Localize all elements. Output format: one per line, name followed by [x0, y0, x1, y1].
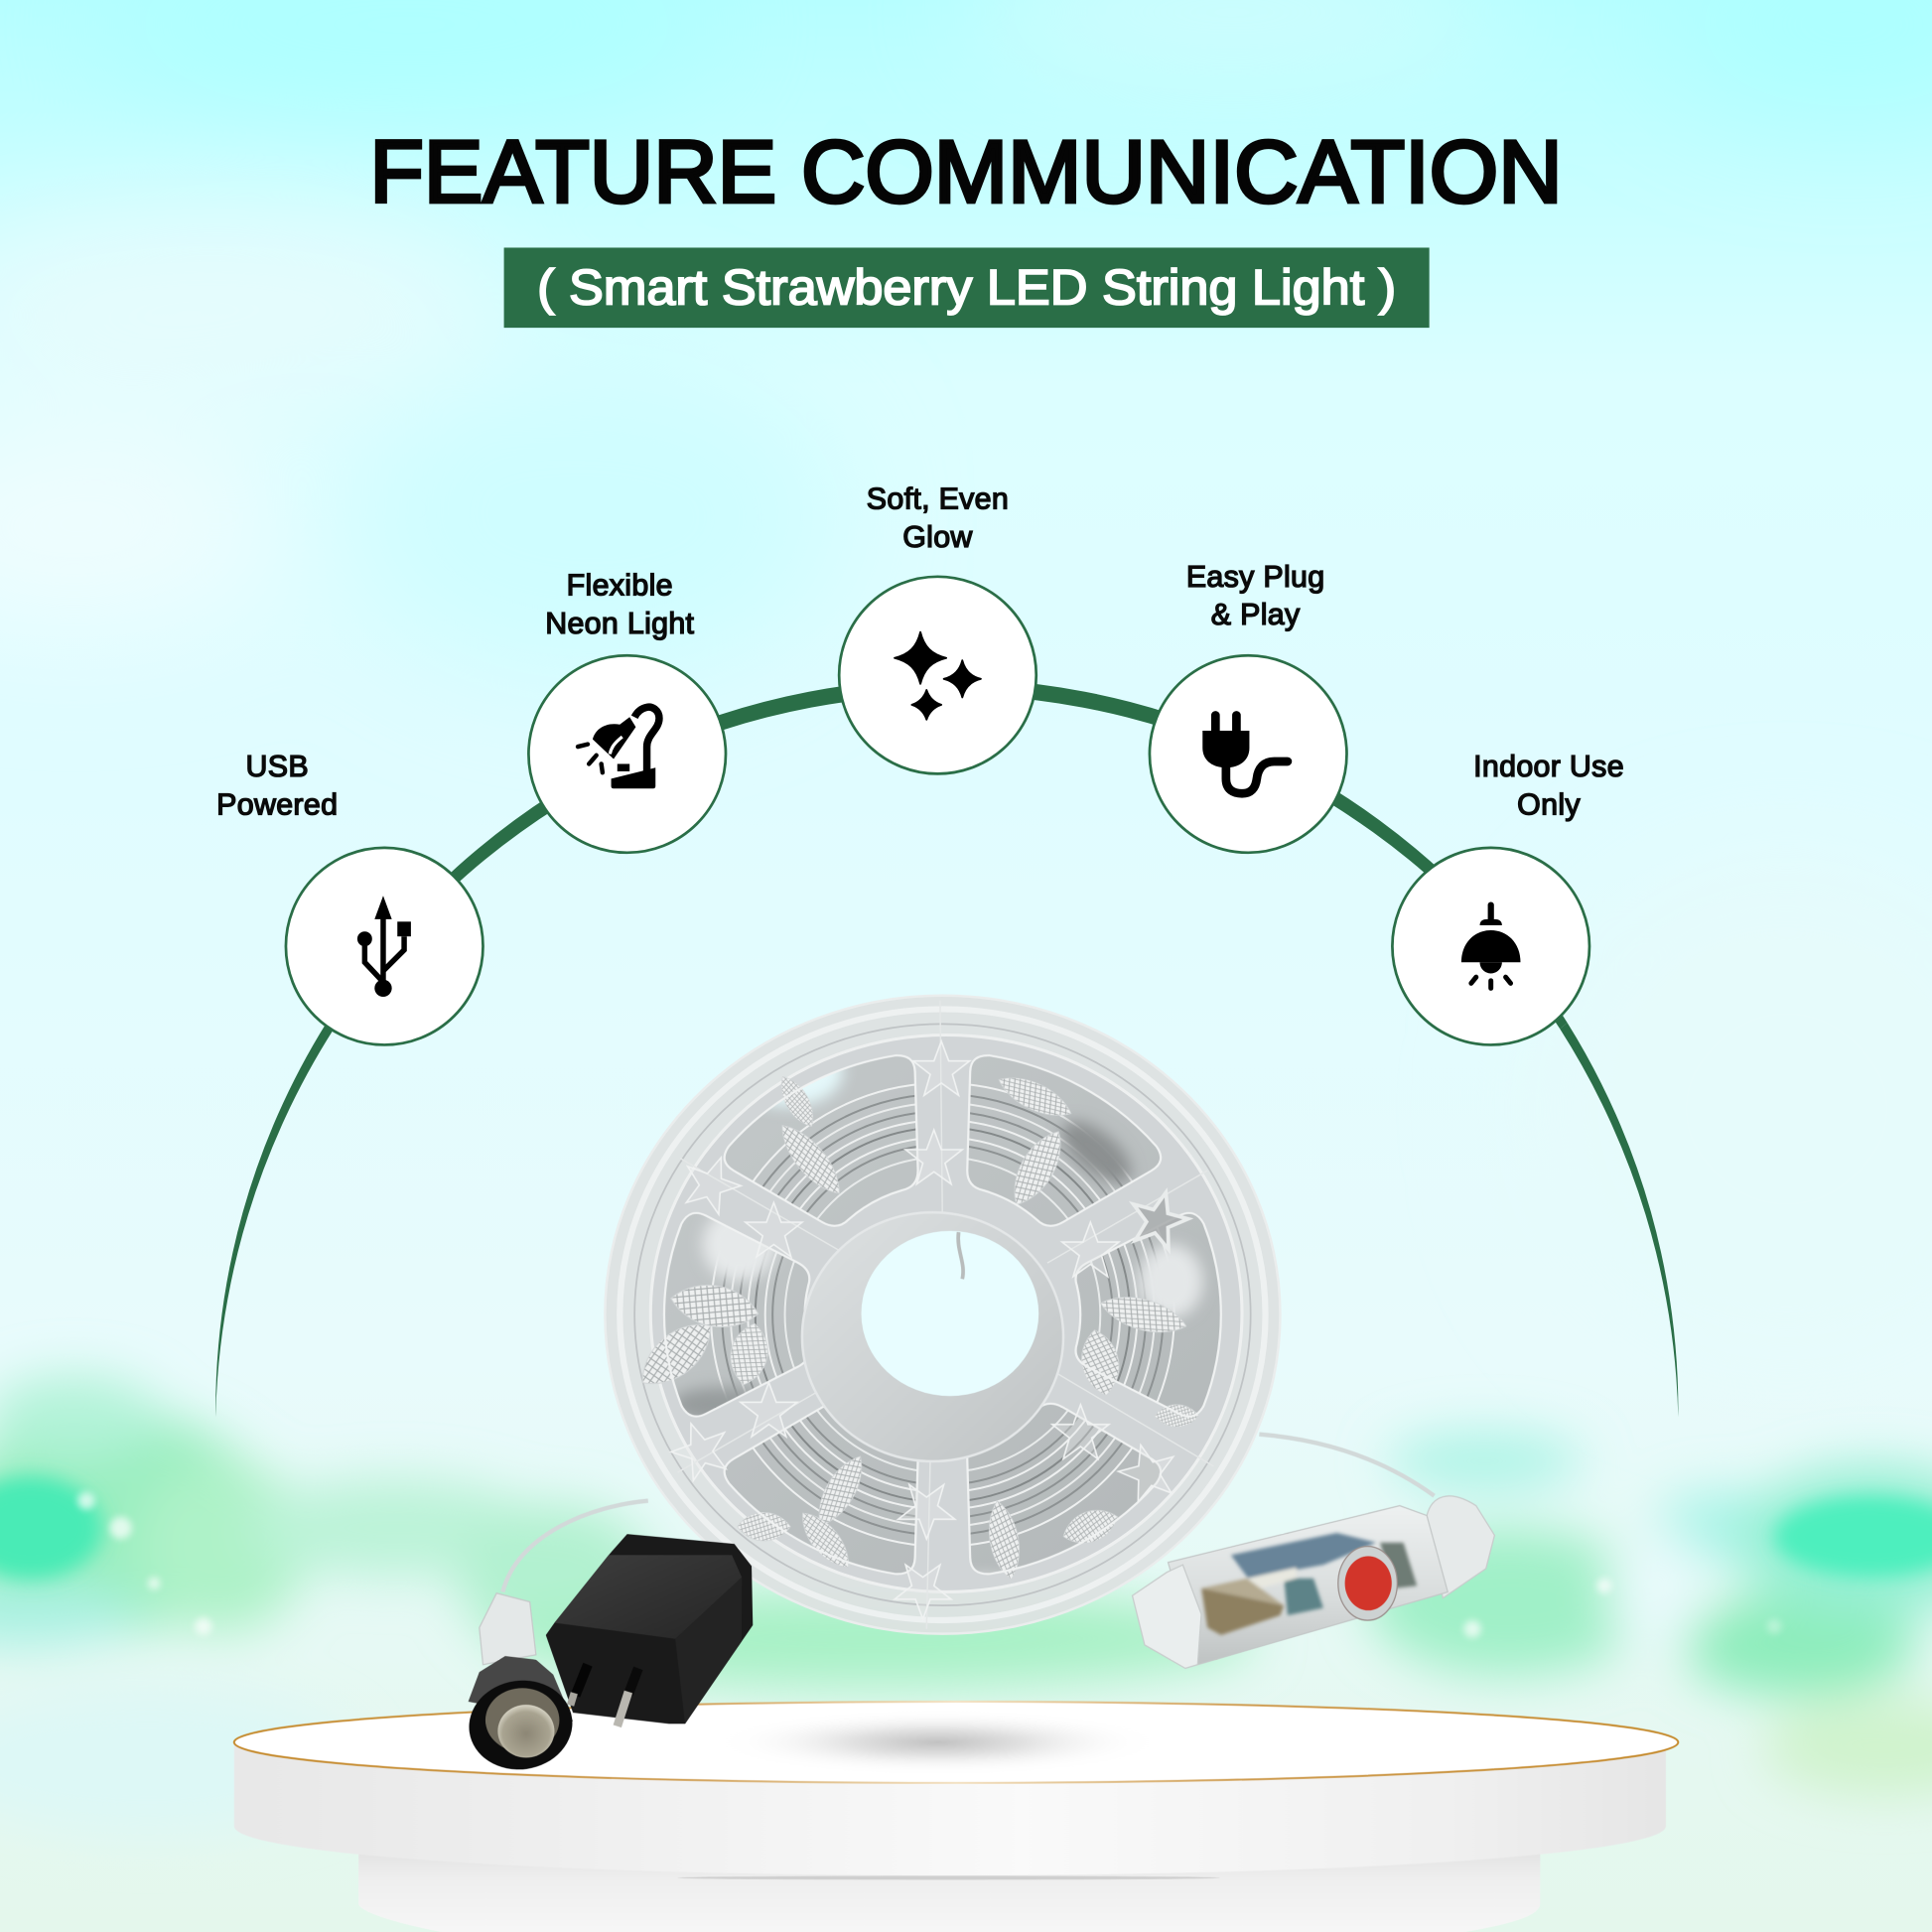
strawberry bulbs: [629, 1067, 1199, 1582]
feature: Easy Plug & Play: [1150, 560, 1346, 853]
circle: USB: [286, 848, 483, 1044]
power cable and plug connector: [464, 1501, 753, 1776]
icon: ceiling lamp: [1461, 901, 1520, 988]
prong far: [571, 1665, 588, 1706]
icon: plug with cable: [1202, 711, 1288, 793]
left end cap: [1133, 1565, 1201, 1668]
spool outer rim: [605, 996, 1280, 1634]
label: Easy Plug & Play: Easy Plug: [1186, 560, 1324, 594]
connector lens: [497, 1705, 554, 1757]
loose wire end in hole: [958, 1232, 963, 1279]
icon: USB symbol: [357, 896, 411, 997]
adapter flange: [546, 1534, 753, 1724]
window outlines: [664, 1036, 1221, 1593]
spool centre hole: [862, 1231, 1038, 1396]
adapter plug: [546, 1534, 753, 1726]
label: Soft, Even Glow: Glow: [902, 520, 973, 554]
circle: lamp: [528, 655, 726, 853]
subtitle banner: [504, 247, 1430, 328]
green tapered arc: [215, 678, 1678, 1417]
controller box with red button: [1133, 1435, 1494, 1668]
spool hub: [802, 1212, 1063, 1461]
right end cap: [1427, 1496, 1494, 1598]
label: Indoor Use Only: Only: [1517, 787, 1581, 821]
connector barrel: [469, 1656, 573, 1722]
circle: ceiling lamp: [1392, 848, 1589, 1044]
clear tube: [1169, 1506, 1448, 1665]
feature: Indoor Use Only: [1392, 750, 1624, 1044]
label: Easy Plug & Play: & Play: [1211, 598, 1301, 631]
platform under-shadow: [678, 1875, 1220, 1879]
connector cavity: [485, 1688, 559, 1752]
platform top shadow: [722, 1711, 1154, 1774]
platform upper tier: [234, 1742, 1666, 1875]
title: FEATURE COMMUNICATION: [369, 122, 1563, 221]
label: USB Powered: USB: [246, 750, 309, 783]
product: LED string light spool: [592, 986, 1294, 1651]
cable to controller: [1259, 1435, 1435, 1496]
circle: plug: [1150, 655, 1346, 853]
clear sleeve: [480, 1593, 536, 1665]
subtitle banner: ( Smart Strawberry LED String Light ): [537, 260, 1396, 316]
embossed stars on the spokes: [664, 1041, 1193, 1619]
clear cable: [502, 1501, 648, 1591]
icon: sparkles: [895, 632, 981, 720]
label: USB Powered: Powered: [216, 787, 338, 821]
adapter top face: [554, 1555, 742, 1639]
label: Indoor Use Only: Indoor Use: [1473, 750, 1624, 783]
platform: [234, 1702, 1678, 1932]
label: Flexible Neon Light: Flexible: [567, 568, 673, 602]
spool inner disc: [650, 1035, 1242, 1591]
red button: [1338, 1547, 1397, 1620]
feature: USB Powered: [216, 750, 483, 1044]
spool windows with wires and bulbs: [592, 986, 1294, 1651]
prong near: [618, 1668, 638, 1726]
label: Flexible Neon Light: Neon Light: [545, 607, 695, 640]
feature: Soft, Even Glow: [839, 483, 1036, 773]
circuit board: [1201, 1533, 1417, 1635]
platform top with gold rim: [234, 1702, 1678, 1783]
icon: desk lamp: [578, 707, 659, 788]
platform lower tier: [358, 1849, 1540, 1932]
connector mouth: [464, 1674, 578, 1776]
label: Soft, Even Glow: Soft, Even: [867, 483, 1009, 516]
adapter side face: [675, 1578, 742, 1724]
feature: Flexible Neon Light: [528, 568, 726, 853]
circle: sparkle: [839, 577, 1036, 773]
